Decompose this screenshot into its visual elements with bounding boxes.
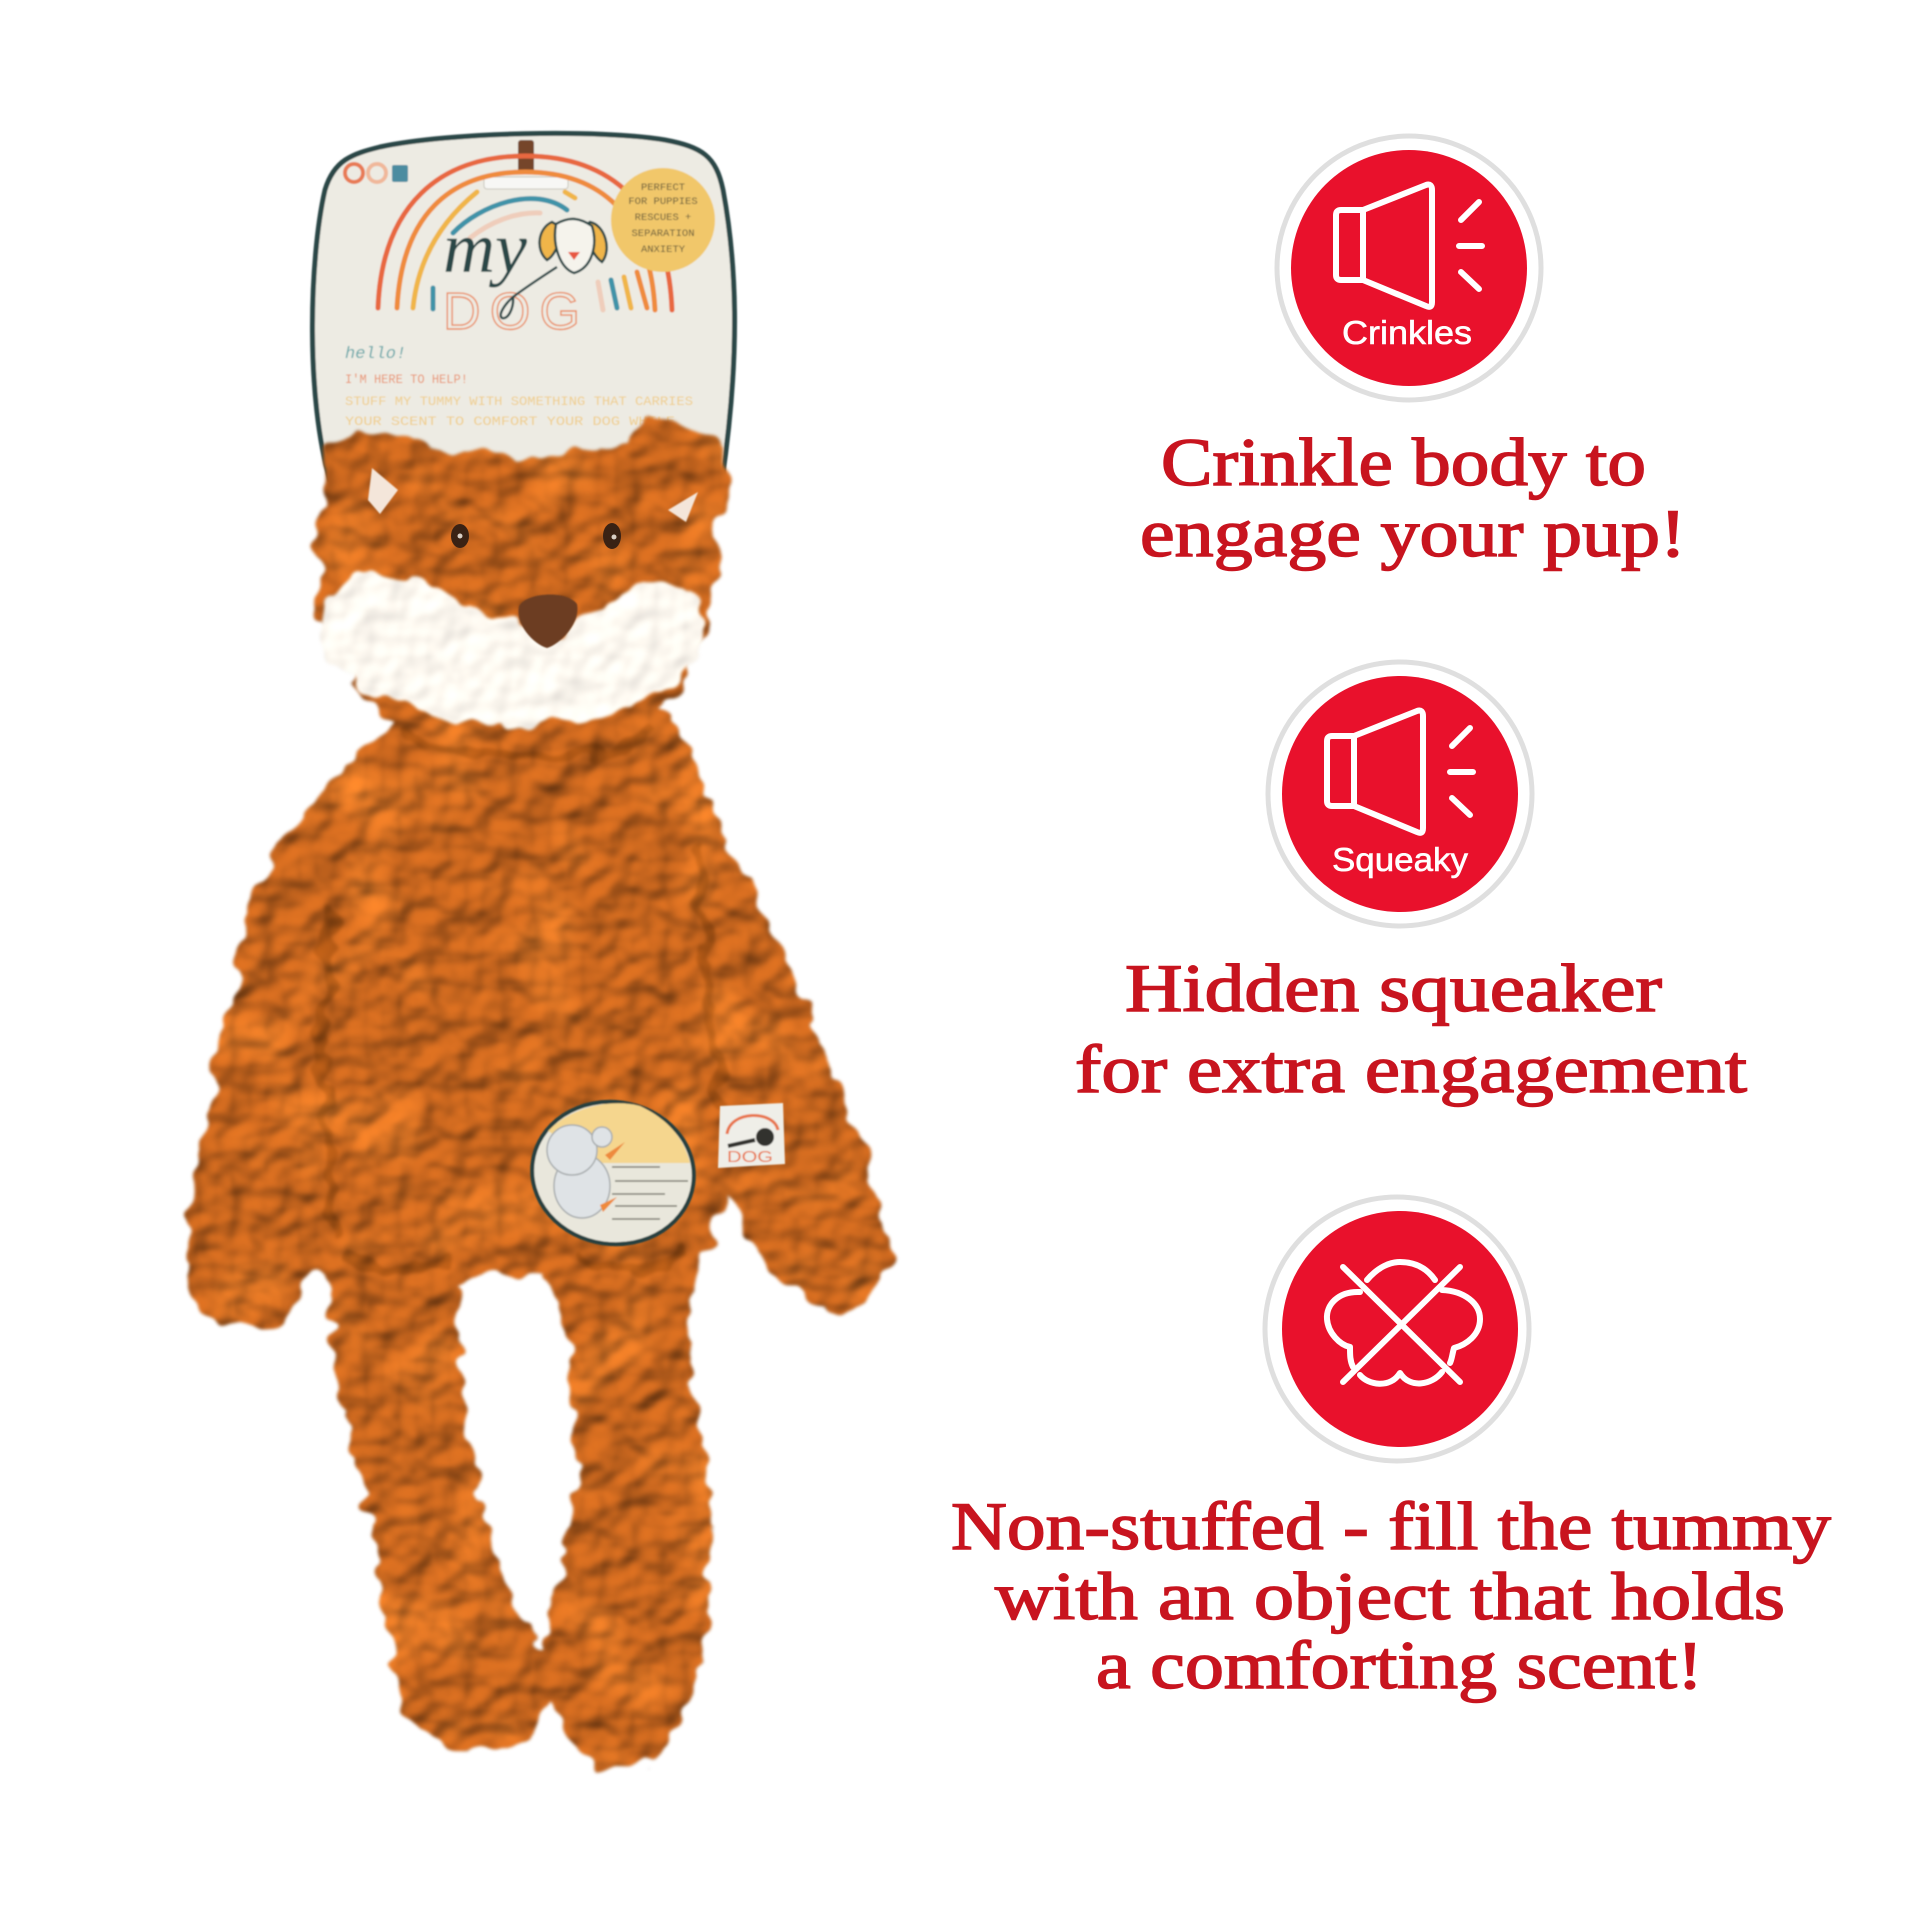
card text [345, 345, 693, 429]
fur shadow seams [324, 735, 722, 1270]
fox white muzzle [321, 569, 706, 725]
badge label: Crinkles [1342, 314, 1472, 351]
yellow claim badge [611, 168, 715, 272]
logo text: DOG: DOG [443, 283, 580, 341]
fox nose [518, 594, 578, 648]
feature: non-stuffed [951, 1197, 1831, 1703]
small brand tag [718, 1103, 785, 1168]
fox ears inner [368, 468, 698, 522]
social icons [345, 164, 408, 182]
speaker symbol [1336, 185, 1482, 307]
heading: non-stuffed: with an object that holds [995, 1558, 1785, 1634]
card text: YOUR SCENT TO COMFORT YOUR DOG WHILE [345, 414, 675, 429]
fox eyes [451, 523, 621, 549]
bear drawing [547, 1125, 612, 1218]
yellow claim badge: PERFECT [641, 182, 685, 194]
feature: squeaky [1075, 662, 1747, 1107]
heading: non-stuffed: a comforting scent! [1096, 1627, 1703, 1703]
card text: STUFF MY TUMMY WITH SOMETHING THAT CARRIES [345, 394, 693, 409]
logo text: my: my [443, 208, 527, 288]
heading: crinkle body: engage your pup! [1140, 495, 1686, 571]
crossed cloud symbol [1327, 1262, 1480, 1384]
yellow claim badge: ANXIETY [641, 244, 686, 256]
round instruction tag [523, 1091, 703, 1255]
product: plush fox toy with packaging [188, 133, 890, 1773]
small brand tag: DOG [727, 1149, 773, 1166]
badge label: Squeaky [1332, 841, 1469, 878]
orange arrow [600, 1142, 625, 1212]
heading: hidden squeaker: for extra engagement [1075, 1031, 1747, 1107]
heading: crinkle body: Crinkle body to [1161, 424, 1646, 500]
card text: I'M HERE TO HELP! [345, 372, 468, 387]
instruction text [612, 1167, 688, 1219]
card text: hello! [345, 345, 406, 364]
fox fur body [188, 420, 890, 1773]
yellow claim badge: FOR PUPPIES [628, 196, 698, 208]
feature: crinkles [1140, 136, 1686, 571]
hang slot [484, 177, 568, 189]
yellow claim badge: SEPARATION [631, 228, 695, 240]
heading: non-stuffed: Non-stuffed - fill the tummy [951, 1488, 1831, 1564]
heading: hidden squeaker: Hidden squeaker [1125, 950, 1662, 1026]
packaging card [312, 133, 735, 480]
speaker symbol [1327, 711, 1473, 833]
icon: no stuffing badge [1265, 1197, 1529, 1461]
rainbow logo [378, 156, 672, 310]
logo icon: dog head and leash [501, 219, 607, 318]
brown hanging tab [518, 140, 534, 174]
yellow claim badge: RESCUES + [635, 212, 691, 224]
icon: squeaky badge [1268, 662, 1532, 926]
icon: crinkles badge [1277, 136, 1541, 400]
